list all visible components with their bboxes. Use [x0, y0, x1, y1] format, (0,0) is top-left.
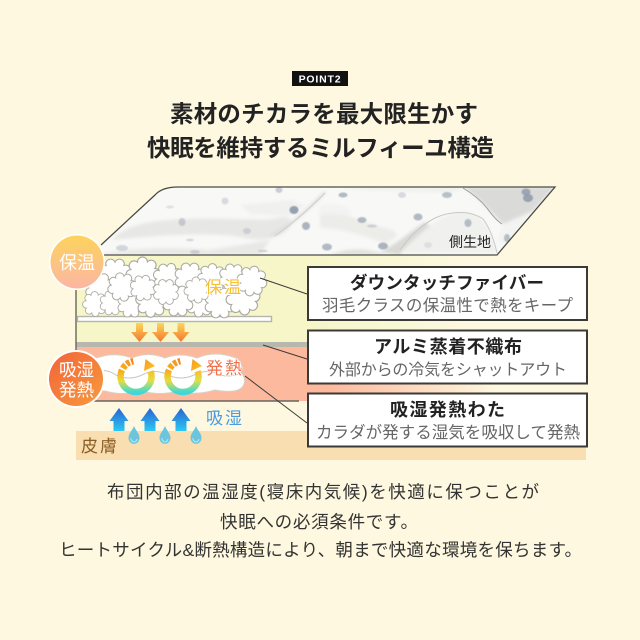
- label: warmth: 保温: [205, 278, 241, 297]
- badge: moisture heat: [47, 350, 105, 408]
- body text: 快眠への必須条件です。: [220, 512, 418, 532]
- panel: moisture heat cotton: [308, 394, 587, 446]
- panel: moisture heat cotton: カラダが発する湿気を吸収して発熱: [316, 423, 580, 442]
- panel: moisture heat cotton: 吸湿発熱わた: [390, 400, 505, 420]
- water drops: [128, 426, 202, 444]
- label: side fabric: 側生地: [449, 234, 491, 250]
- panel: down touch fiber: 羽毛クラスの保温性で熱をキープ: [322, 296, 574, 315]
- panel: aluminum nonwoven: [308, 330, 587, 384]
- point badge: POINT2: [299, 74, 341, 86]
- panel: down touch fiber: [308, 267, 587, 320]
- leader lines: [245, 278, 307, 423]
- label: heat: 発熱: [206, 359, 242, 378]
- label: moisture absorption: 吸湿: [206, 409, 242, 428]
- badge: warmth: 保温: [59, 253, 95, 273]
- layer diagram background: [76, 255, 586, 460]
- down arrows: [131, 323, 190, 342]
- body text: 布団内部の温湿度(寝床内気候)を快適に保つことが: [107, 482, 540, 502]
- panel: aluminum nonwoven: アルミ蒸着不織布: [374, 337, 522, 357]
- title: [147, 101, 494, 161]
- up arrows: [110, 408, 190, 431]
- quilt side fabric: [95, 185, 560, 257]
- badge: warmth: [49, 234, 105, 290]
- icon: heat ring 2: [168, 359, 202, 392]
- point badge: [292, 71, 348, 86]
- panel: aluminum nonwoven: 外部からの冷気をシャットアウト: [329, 361, 567, 379]
- badge: moisture heat: 吸湿: [59, 360, 94, 380]
- fiber clouds: [80, 253, 272, 322]
- title: 快眠を維持するミルフィーユ構造: [147, 135, 494, 161]
- label: skin: 皮膚: [81, 437, 117, 456]
- body text: ヒートサイクル&断熱構造により、朝まで快適な環境を保ちます。: [59, 540, 582, 560]
- moisture heat cotton: [83, 354, 245, 394]
- panel: down touch fiber: ダウンタッチファイバー: [350, 273, 544, 293]
- icon: heat ring 1: [121, 359, 155, 392]
- badge: moisture heat: 発熱: [59, 380, 94, 400]
- body text: [59, 482, 582, 560]
- title: 素材のチカラを最大限生かす: [170, 101, 478, 127]
